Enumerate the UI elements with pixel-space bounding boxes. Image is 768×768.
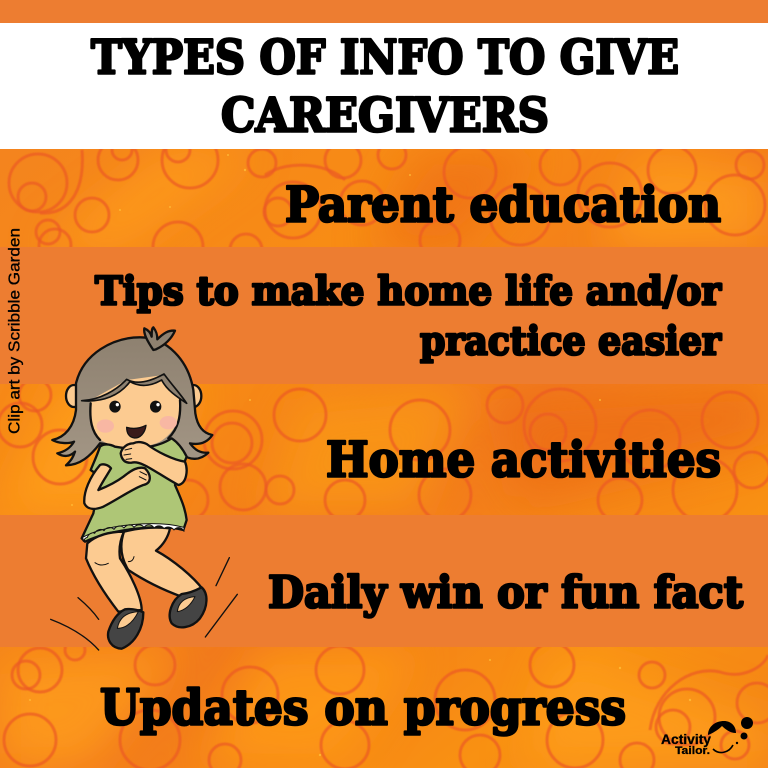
title banner: TYPES OF INFO TO GIVE xyxy=(91,30,679,86)
tuft xyxy=(144,327,175,350)
solid band: tips xyxy=(0,247,768,384)
hair back xyxy=(52,337,212,465)
heading: parent education: Parent education xyxy=(285,176,721,234)
logo: Activity Tailor: Activity xyxy=(661,731,711,747)
logo: Activity Tailor xyxy=(661,717,753,757)
illustration: jumping girl xyxy=(51,327,237,650)
left shoe xyxy=(108,609,143,649)
top orange strip xyxy=(0,0,768,23)
right shoe xyxy=(170,587,206,627)
motion lines xyxy=(51,558,237,650)
cheeks xyxy=(97,416,177,433)
text block: tips: Tips to make home life and/or xyxy=(95,268,721,314)
left leg xyxy=(86,532,142,612)
ears xyxy=(66,385,201,407)
front arm xyxy=(84,464,150,509)
face xyxy=(91,375,180,448)
solid band: daily win xyxy=(0,515,768,647)
dress xyxy=(82,438,187,542)
back arm xyxy=(121,442,187,485)
title banner xyxy=(0,23,768,149)
fringe xyxy=(82,374,187,403)
title banner: CAREGIVERS xyxy=(221,88,549,144)
heading: home activities: Home activities xyxy=(326,430,721,488)
text block: tips xyxy=(95,268,721,364)
logo: Activity Tailor: Tailor. xyxy=(675,745,710,757)
heading: daily win or fun fact: Daily win or fun fact xyxy=(268,568,744,618)
mouth xyxy=(127,425,146,438)
text block: tips: practice easier xyxy=(420,318,721,364)
heading: updates on progress: Updates on progress xyxy=(100,678,626,736)
right leg xyxy=(121,528,203,597)
eyes xyxy=(109,401,161,413)
clip art credit: Clip art by Scribble Garden xyxy=(6,228,24,434)
dress hem xyxy=(83,524,184,541)
